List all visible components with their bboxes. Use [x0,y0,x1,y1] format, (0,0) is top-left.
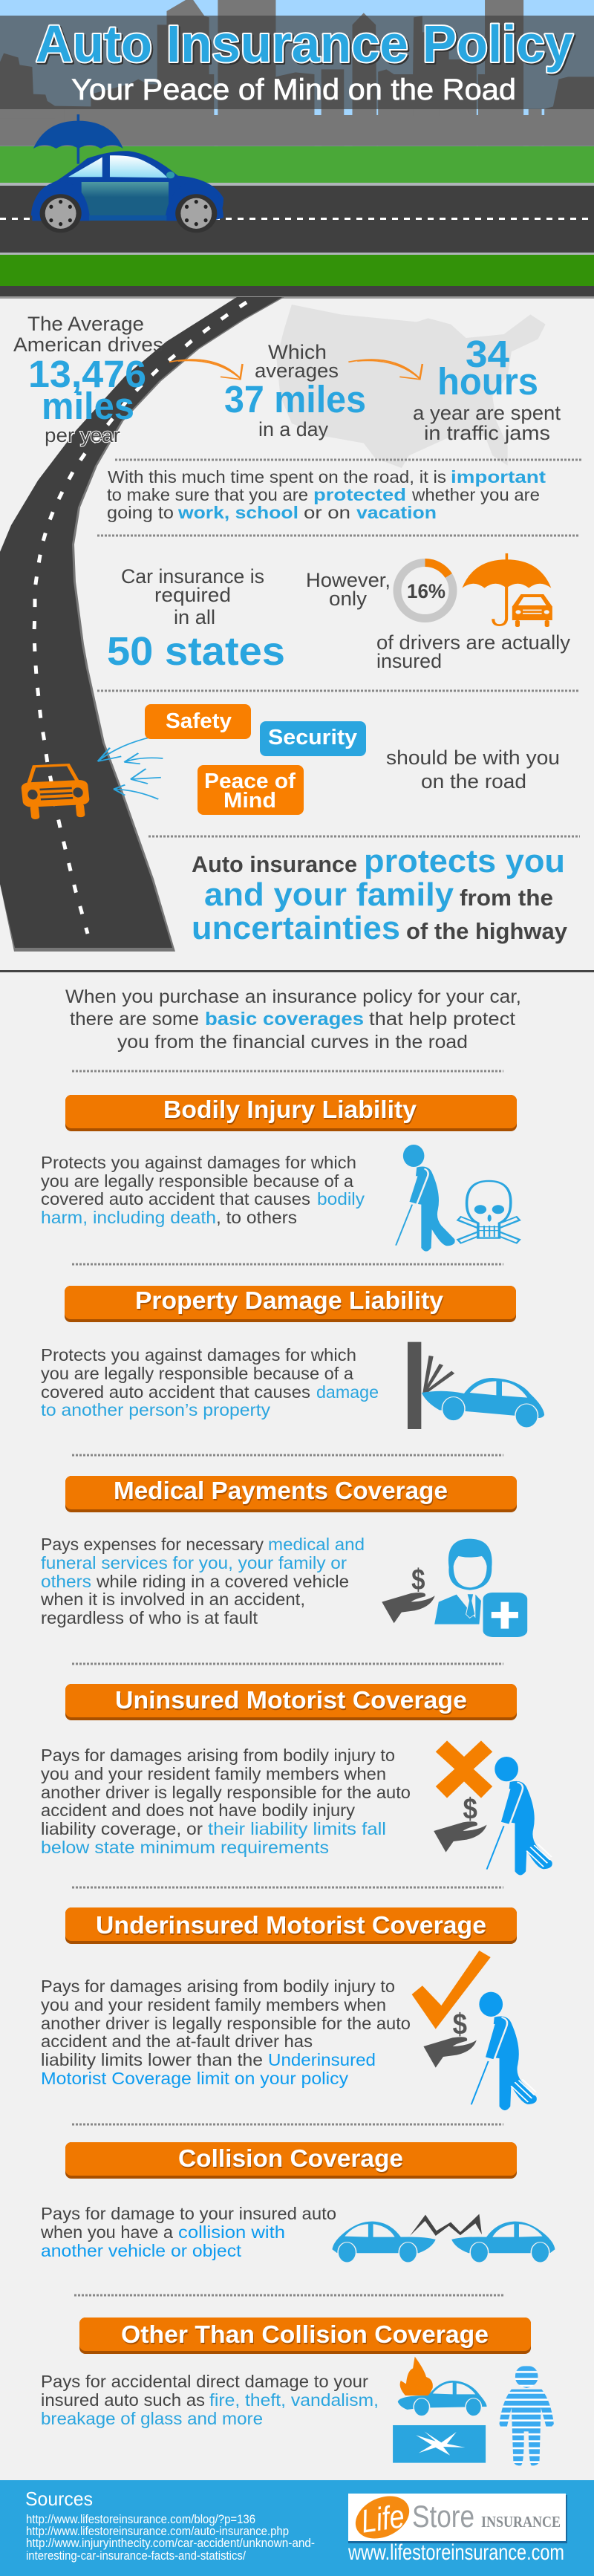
description: breakage of glass and more [41,2409,263,2428]
description: bodily [317,1189,365,1209]
sources: http://www.injuryinthecity.com/car-accident/unknown-and- [26,2536,315,2550]
stat: 16% insured [306,553,571,672]
description: covered auto accident that causes [41,1382,310,1402]
arrow: orange curve 2 [348,360,422,380]
car body [31,151,223,221]
tag: peace of mind: Mind [223,789,276,813]
stat: required in 50 states [107,565,285,674]
callout: protects you and your family: from the [460,885,553,911]
stat: 16% insured: of drivers are actually [376,631,571,654]
description [41,1977,411,2088]
text: importance of protection: protected [313,485,406,504]
tag: security [260,721,366,756]
stat: required in 50 states: in all [174,606,215,628]
description: liability limits lower than the [41,2050,263,2069]
text: importance of protection [107,467,546,522]
description: Pays for accidental direct damage to your [41,2372,368,2391]
heading bar: Collision Coverage [178,2144,403,2172]
stat: 13,476 miles per year: miles [42,385,134,427]
donut chart: 16% [397,563,453,618]
stat: 13,476 miles per year: American drives [13,334,163,356]
icon: check mark, money and injured man: $ [453,2007,467,2040]
heading bar: Bodily Injury Liability [163,1096,417,1123]
heading bar: Other Than Collision Coverage [121,2320,489,2348]
arrows: blue pointing to car [98,735,163,799]
description: insured auto such as [41,2390,205,2410]
heading bar: Medical Payments Coverage [114,1477,448,1504]
description: Pays for damage to your insured auto [41,2204,336,2223]
heading bar [79,2318,531,2354]
description [41,2372,379,2428]
heading bar: Uninsured Motorist Coverage [115,1686,467,1714]
sources [25,2488,315,2563]
tag: security: Security [268,726,357,749]
description: their liability limits fall [208,1819,386,1838]
callout: protects you and your family: Auto insurance [192,851,357,877]
stat: 37 miles a day [224,341,366,440]
description: you are legally responsible because of a [41,1364,353,1383]
stat: 16% insured: only [329,588,368,610]
section: medical payments coverage [40,1476,527,1637]
section: underinsured motorist coverage [41,1907,537,2110]
text: basic coverages intro [65,986,521,1053]
sources: interesting-car-insurance-facts-and-statistics/ [26,2549,246,2563]
stat: 13,476 miles per year [13,313,163,446]
description: while riding in a covered vehicle [96,1572,349,1591]
stat: 16% insured: However, [306,569,391,591]
icon: car under umbrella [31,114,223,232]
logo: life store insurance: Store [412,2499,474,2534]
text: basic coverages intro: that help protect [369,1009,515,1030]
tag: peace of mind: Peace of [204,770,296,793]
text: basic coverages intro: there are some [70,1009,199,1030]
text: should be with you: should be with you [386,747,560,769]
text: importance of protection: to make sure that you are [107,485,308,504]
description: Underinsured [268,2050,376,2069]
text: importance of protection: work, school [177,503,298,522]
stat: 34 hours in traffic: hours [437,360,538,403]
stat: 13,476 miles per year: per year [45,424,120,446]
description: Pays for damages arising from bodily injury to [41,1977,395,1996]
description: Pays expenses for necessary [41,1535,264,1554]
stat: 34 hours in traffic: 34 [466,333,510,375]
icon: two cars colliding [332,2214,555,2263]
description: harm, including death [41,1208,216,1227]
text: importance of protection: going to [107,503,174,522]
subtitle: Your Peace of Mind on the Road [71,74,516,106]
text: should be with you [386,747,560,793]
description [40,2204,336,2260]
stat: 34 hours in traffic [413,333,561,444]
stat: required in 50 states: required [154,584,231,606]
icon: orange car on road [19,764,91,820]
text: basic coverages intro: basic coverages [205,1009,364,1030]
stat: 16% insured: insured [376,650,442,672]
heading bar [65,1684,517,1720]
sources: http://www.lifestoreinsurance.com/blog/?p=136 [26,2512,255,2526]
section: collision coverage [40,2142,555,2263]
section: other than collision coverage [41,2318,554,2465]
heading bar [65,1476,517,1512]
icon: x mark, money and injured man [434,1740,552,1875]
title band [0,16,594,109]
icon: navy umbrella [33,114,123,164]
stat: 34 hours in traffic: in traffic jams [424,422,550,444]
footer [0,2480,594,2576]
section: bodily injury liability [41,1095,519,1252]
description: Motorist Coverage limit on your policy [41,2069,349,2088]
description: others [41,1572,91,1591]
description: damage [316,1382,379,1402]
description [40,1535,365,1627]
city skyline [0,0,594,146]
description: Protects you against damages for which [41,1153,356,1172]
icon: broken glass [393,2425,486,2463]
stat: 37 miles a day: Which [268,341,327,363]
heading bar: Underinsured Motorist Coverage [96,1911,486,1939]
section: uninsured motorist coverage [41,1684,552,1875]
text: importance of protection: or on [304,503,350,522]
heading bar: Property Damage Liability [135,1287,444,1314]
callout: protects you and your family: protects you [364,843,565,879]
heading bar [65,1286,516,1322]
lower grass [0,255,594,286]
description: you and your resident family members when [41,1995,386,2014]
stat: 34 hours in traffic: a year are spent [413,402,561,424]
text: importance of protection: With this much time spent on the road, it is [108,467,446,487]
heading bar [65,1095,517,1131]
description: Pays for damages arising from bodily injury to [41,1746,395,1765]
description [41,1746,411,1857]
sources: Sources [25,2488,93,2510]
description [41,1153,365,1227]
description: medical and [268,1535,365,1554]
stat: 37 miles a day: 37 miles [224,378,366,420]
logo: life store insurance: INSURANCE [481,2513,561,2531]
text: importance of protection: whether you are [411,485,540,504]
description: collision with [178,2222,285,2242]
description: Protects you against damages for which [41,1345,356,1365]
stat: required in 50 states: 50 states [107,629,285,674]
description: funeral services for you, your family or [41,1553,347,1572]
description: when you have a [40,2222,173,2242]
logo: life store insurance: Life [359,2498,407,2540]
text: should be with you: on the road [421,770,526,793]
description: another driver is legally responsible for the auto [41,1783,411,1802]
text: basic coverages intro: you from the financial curves in the road [117,1032,468,1053]
callout: protects you and your family: and your family [204,876,454,913]
icon: burning car [398,2357,487,2416]
icon: doctor, money and medical cross [382,1539,527,1637]
text: basic coverages intro: When you purchase an insurance policy for your car, [65,986,521,1007]
heading bar [65,1907,517,1944]
callout: protects you and your family: uncertainties [192,910,400,946]
description: you are legally responsible because of a [41,1171,353,1191]
icon: doctor, money and medical cross: $ [411,1563,425,1596]
icon: check mark, money and injured man [412,1951,537,2110]
description: accident and does not have bodily injury [41,1801,356,1820]
arrow: orange curve 1 [169,360,243,380]
upper grass [0,146,594,183]
description [41,1345,379,1419]
section: property damage liability [41,1286,544,1429]
description: to another person’s property [41,1400,271,1419]
description: , to others [216,1208,297,1227]
stat: 37 miles a day: in a day [258,418,328,440]
logo: life store insurance [348,2488,567,2547]
stat: 13,476 miles per year: The Average [27,313,144,335]
icon: orange umbrella and car [462,553,552,627]
description: regardless of who is at fault [41,1608,258,1627]
description: when it is involved in an accident, [40,1590,305,1609]
tag: peace of mind [198,765,304,815]
donut chart: 16%: 16% [407,580,446,602]
heading bar [65,2142,517,2179]
road [0,183,594,255]
description: below state minimum requirements [41,1838,329,1857]
text: importance of protection: vacation [356,503,437,522]
description: liability coverage, or [41,1819,203,1838]
stat: 13,476 miles per year: 13,476 [28,353,146,395]
icon: x mark, money and injured man: $ [463,1792,477,1825]
icon: car crashing into wall [408,1342,544,1429]
tag: safety [145,704,251,739]
icon: striped thief [499,2366,554,2465]
header scene [0,0,594,299]
curved road [0,297,284,952]
callout: protects you and your family [192,843,568,946]
sources: http://www.lifestoreinsurance.com/auto-insurance.php [26,2524,289,2538]
tag: safety: Safety [166,709,232,733]
wheels [40,194,82,232]
description: another driver is legally responsible for the auto [41,2014,411,2033]
text: importance of protection: important [451,467,546,487]
stat: 37 miles a day: averages [255,360,339,382]
description: accident and the at-fault driver has [41,2032,313,2051]
description: fire, theft, vandalism, [209,2390,379,2410]
description: covered auto accident that causes [41,1189,310,1209]
title: Auto Insurance Policy [36,15,573,73]
us map [276,305,546,468]
stat: required in 50 states: Car insurance is [121,565,264,588]
description: another vehicle or object [41,2241,242,2260]
callout: protects you and your family: of the highway [406,918,568,944]
description: you and your resident family members when [41,1764,386,1783]
icon: injured man and skull [396,1145,519,1252]
